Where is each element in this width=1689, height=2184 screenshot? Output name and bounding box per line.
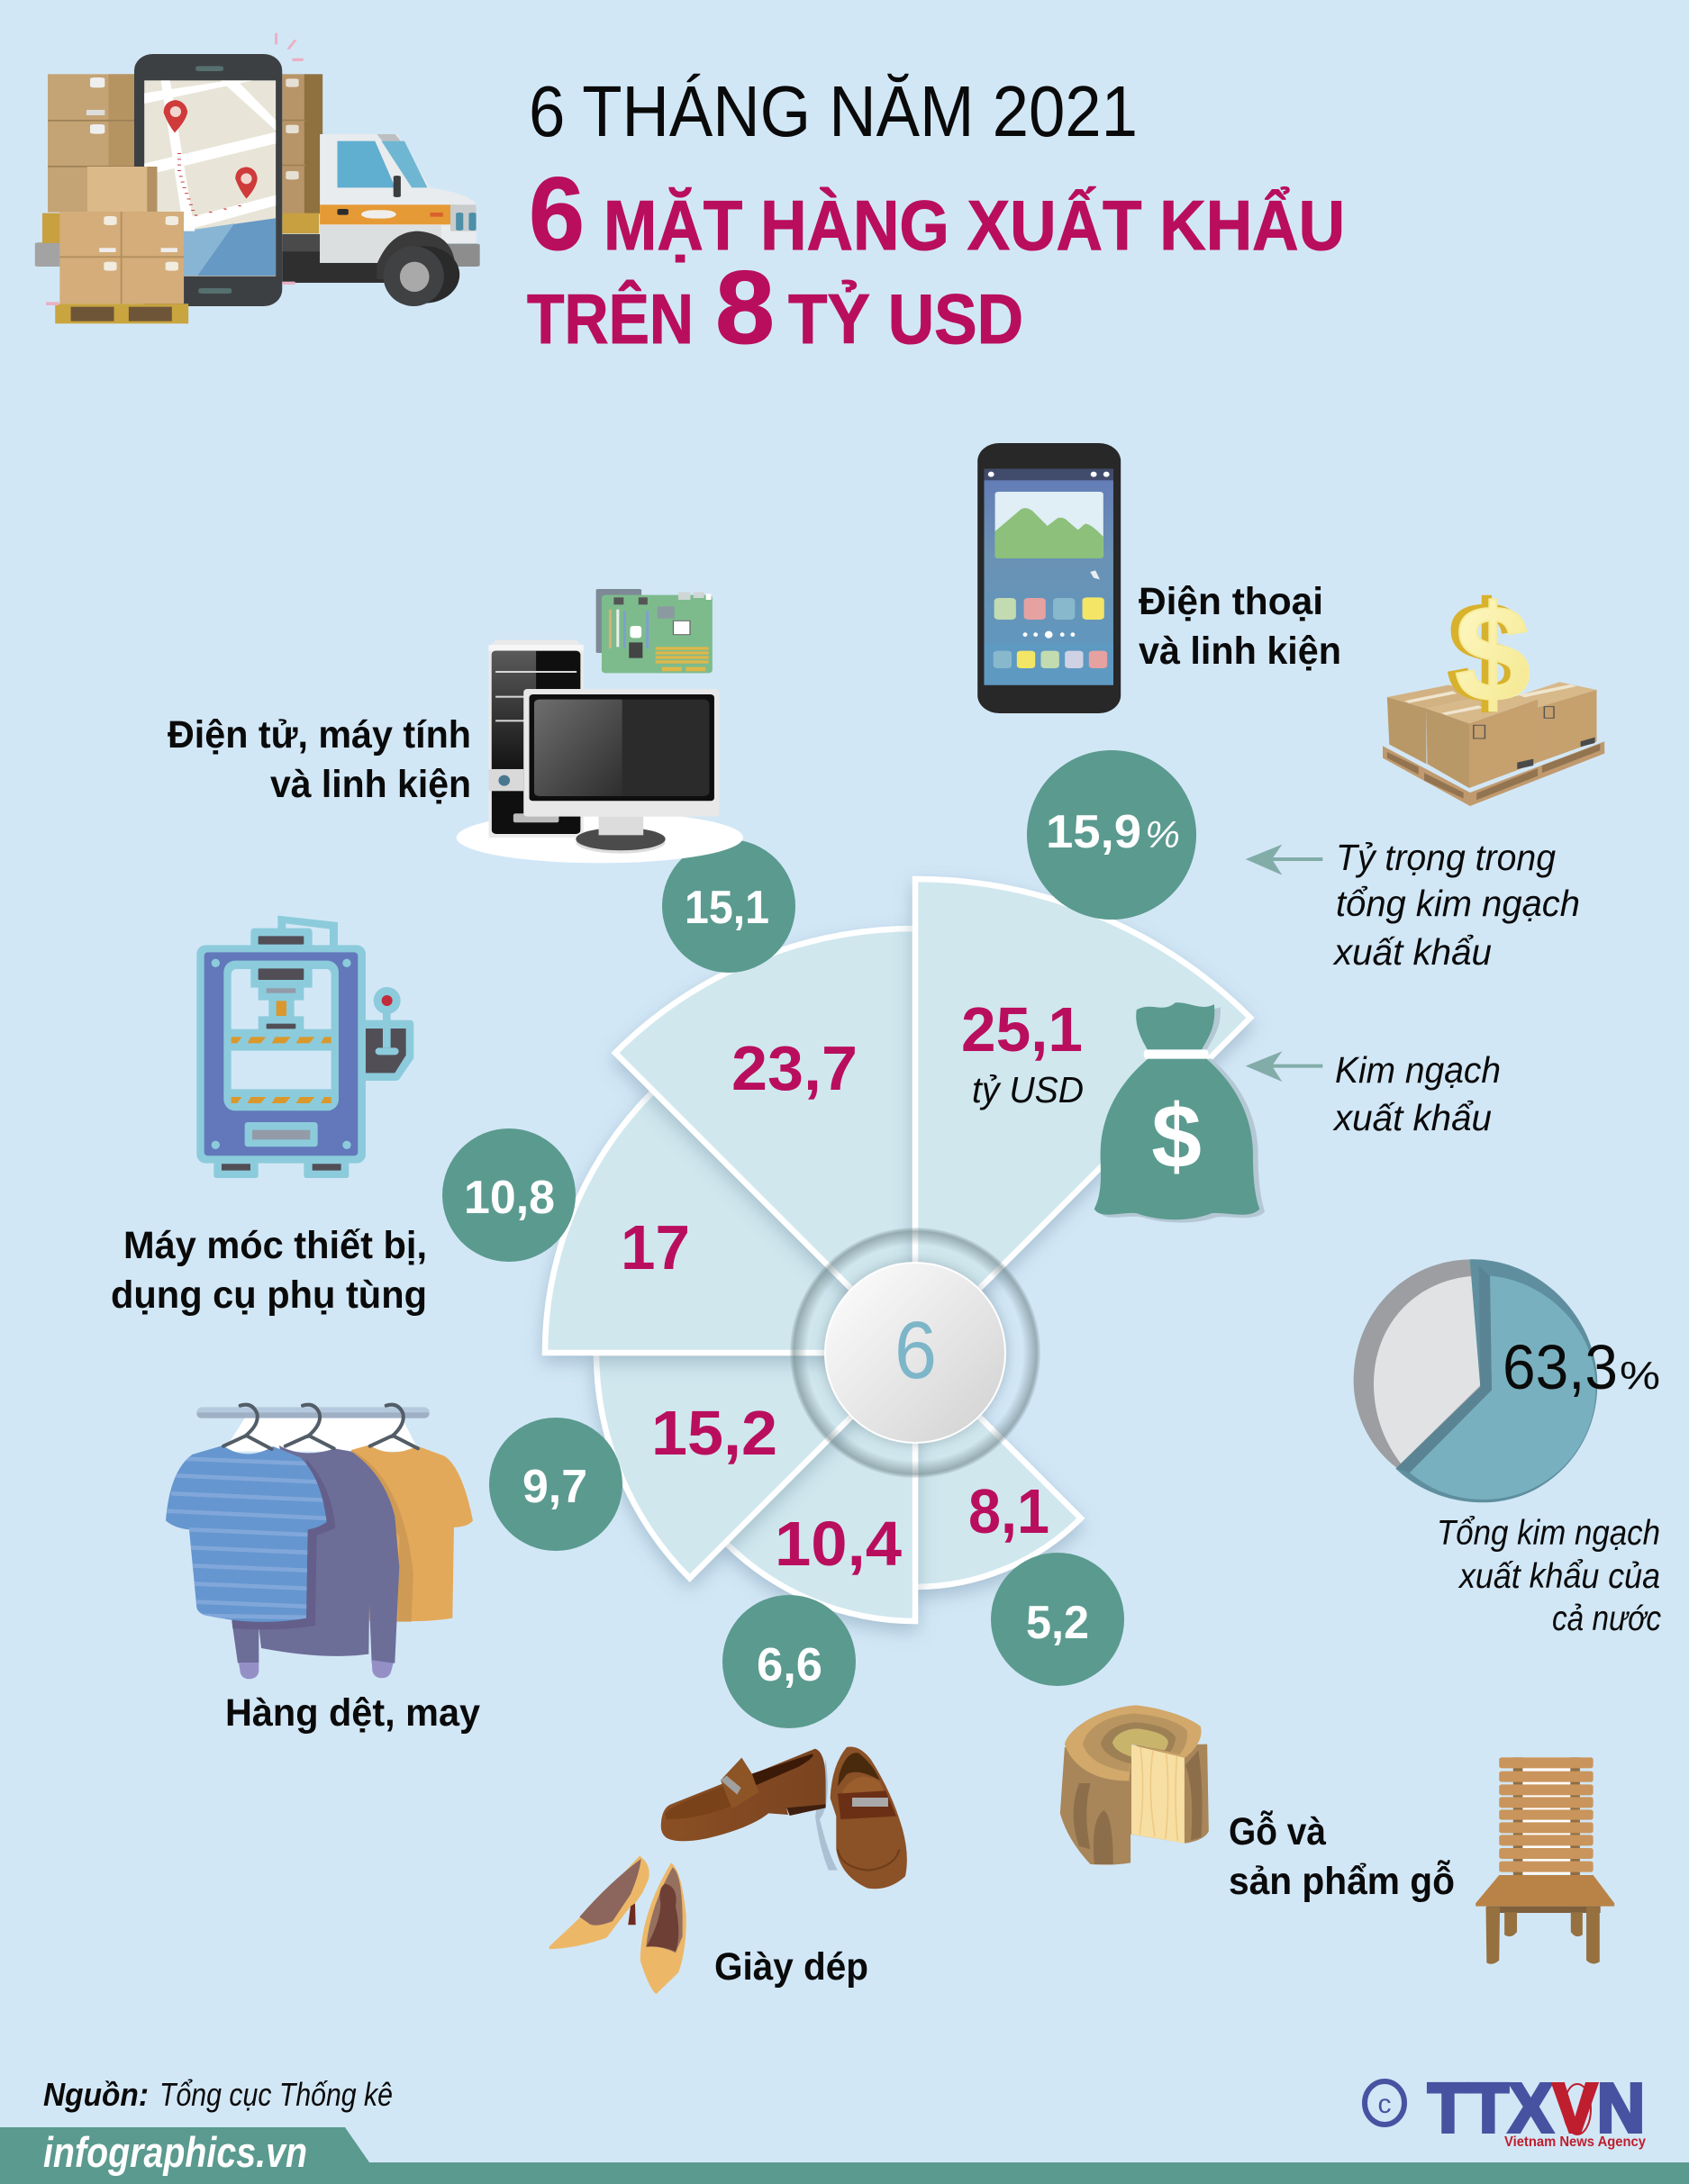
hub number: 6 xyxy=(894,1306,937,1396)
sector: dệt may xyxy=(596,1353,915,1578)
centre hub xyxy=(790,1228,1040,1478)
icon: clothes on rack xyxy=(165,1405,473,1679)
icon: boxes on pallet with gold dollar xyxy=(1383,575,1604,806)
copyright mark: c xyxy=(1378,2089,1391,2119)
subtitle line: 6 THÁNG NĂM 2021 xyxy=(529,71,1138,151)
icon: phone with map xyxy=(134,54,282,306)
circle 9,7: 9,7 xyxy=(522,1461,587,1513)
circle 15,1: 15,1 xyxy=(685,882,769,934)
label: giày dép: Giày dép xyxy=(714,1945,868,1989)
legend text: share: xuất khẩu xyxy=(1332,931,1492,973)
icon: front stacked boxes on pallet xyxy=(46,33,304,323)
label: gỗ: Gỗ và xyxy=(1229,1809,1327,1853)
label: máy móc: dụng cụ phụ tùng xyxy=(111,1273,427,1317)
icon: press machine xyxy=(196,916,413,1178)
logo TTXVN: Vietnam News Agency xyxy=(1504,2134,1646,2150)
headline line 1: MẶT HÀNG XUẤT KHẨU xyxy=(604,186,1345,265)
arrow to value xyxy=(1246,1051,1322,1082)
pie chart 63,3% xyxy=(1354,1259,1660,1502)
icon: boxes on pallet with gold dollar: $ xyxy=(1448,575,1525,731)
website: infographics.vn xyxy=(43,2128,307,2176)
value 8,1: 8,1 xyxy=(968,1476,1049,1546)
arrow to share xyxy=(1246,845,1322,875)
legend text: share xyxy=(1332,837,1580,973)
icon: money bag xyxy=(1094,1002,1265,1223)
sector: máy móc xyxy=(545,1091,915,1353)
logo TTXVN: TTXVN xyxy=(1428,2070,1645,2147)
headline line 1: TỶ USD xyxy=(788,279,1023,358)
icon: computer xyxy=(457,589,743,863)
label: điện tử xyxy=(168,713,471,806)
circle 15,9%: % xyxy=(1145,813,1180,856)
headline line 1: 6 xyxy=(529,157,585,272)
circle 5,2: 5,2 xyxy=(1026,1597,1089,1649)
icon: men's loafers xyxy=(661,1746,907,1889)
icon: wooden chair xyxy=(1476,1757,1614,1964)
circle 9,7 xyxy=(489,1418,622,1551)
legend text: share: Tỷ trọng trong xyxy=(1336,837,1556,878)
sector: gỗ xyxy=(915,1353,1081,1587)
circle 15,1 xyxy=(662,839,795,973)
headline line 1: 8 xyxy=(715,250,775,366)
circle 10,8: 10,8 xyxy=(464,1172,555,1224)
legend text: value: xuất khẩu xyxy=(1332,1097,1492,1138)
legend text: share: tổng kim ngạch xyxy=(1336,883,1580,924)
footer band xyxy=(0,2127,1689,2184)
label: điện thoại xyxy=(1139,580,1341,673)
pie chart 63,3%: 63,3 xyxy=(1503,1332,1618,1402)
annotation arrows xyxy=(1246,845,1322,1082)
headline line 1 xyxy=(527,157,1345,366)
sector: giày dép xyxy=(725,1353,915,1621)
icon: truck body xyxy=(35,74,480,306)
headline line 1: TRÊN xyxy=(527,279,694,358)
circle 5,2 xyxy=(991,1553,1124,1686)
icon: tree stump xyxy=(1060,1705,1209,1865)
sector: điện thoại xyxy=(915,879,1250,1353)
icon: women's heels xyxy=(549,1856,686,1994)
circle 15,9%: 15,9 xyxy=(1046,806,1141,858)
label: điện thoại: Điện thoại xyxy=(1139,580,1323,623)
icon: delivery truck with phone map xyxy=(35,33,480,323)
label: điện tử: và linh kiện xyxy=(270,763,471,806)
circle 10,8 xyxy=(442,1128,576,1262)
label: máy móc xyxy=(111,1224,427,1317)
value 15,2: 15,2 xyxy=(651,1398,777,1468)
label: máy móc: Máy móc thiết bị, xyxy=(123,1224,427,1267)
label: gỗ: sản phẩm gỗ xyxy=(1229,1859,1455,1903)
chart: radial sectors xyxy=(545,879,1250,1621)
legend text: value xyxy=(1332,1049,1501,1138)
value 23,7: 23,7 xyxy=(731,1033,858,1103)
icon: dollar on bag: $ xyxy=(1151,1086,1202,1187)
icon: shoes xyxy=(549,1746,907,1994)
icon: phone xyxy=(977,443,1121,713)
pie chart 63,3%: % xyxy=(1620,1354,1660,1398)
circle 15,9% xyxy=(1027,750,1196,920)
legend text: value: Kim ngạch xyxy=(1335,1049,1501,1091)
pie caption: cả nước xyxy=(1552,1599,1661,1638)
unit: tỷ USD xyxy=(972,1069,1084,1110)
value 10,4: 10,4 xyxy=(775,1509,902,1579)
copyright mark xyxy=(1365,2081,1404,2125)
label: gỗ xyxy=(1229,1809,1455,1903)
source: Tổng cục Thống kê xyxy=(159,2076,393,2113)
label: điện thoại: và linh kiện xyxy=(1139,630,1341,673)
source: Nguồn: xyxy=(43,2076,149,2113)
title xyxy=(527,71,1345,366)
icon: back boxes xyxy=(48,74,135,213)
pie caption: xuất khẩu của xyxy=(1457,1557,1660,1596)
circle 6,6 xyxy=(722,1595,856,1728)
icon: motherboard xyxy=(596,589,713,673)
circle 6,6: 6,6 xyxy=(757,1639,822,1691)
sector values xyxy=(621,994,1084,1579)
icon: boxes on pallet with gold dollar: $ xyxy=(1455,577,1530,730)
value 25,1: 25,1 xyxy=(961,994,1083,1065)
pie caption xyxy=(1437,1514,1661,1638)
sector: điện tử xyxy=(615,929,915,1353)
label: dệt may: Hàng dệt, may xyxy=(225,1691,480,1735)
source xyxy=(43,2076,393,2113)
value 17: 17 xyxy=(621,1212,690,1282)
label: điện tử: Điện tử, máy tính xyxy=(168,713,471,757)
pie caption: Tổng kim ngạch xyxy=(1437,1514,1660,1553)
share circles xyxy=(442,750,1196,1728)
